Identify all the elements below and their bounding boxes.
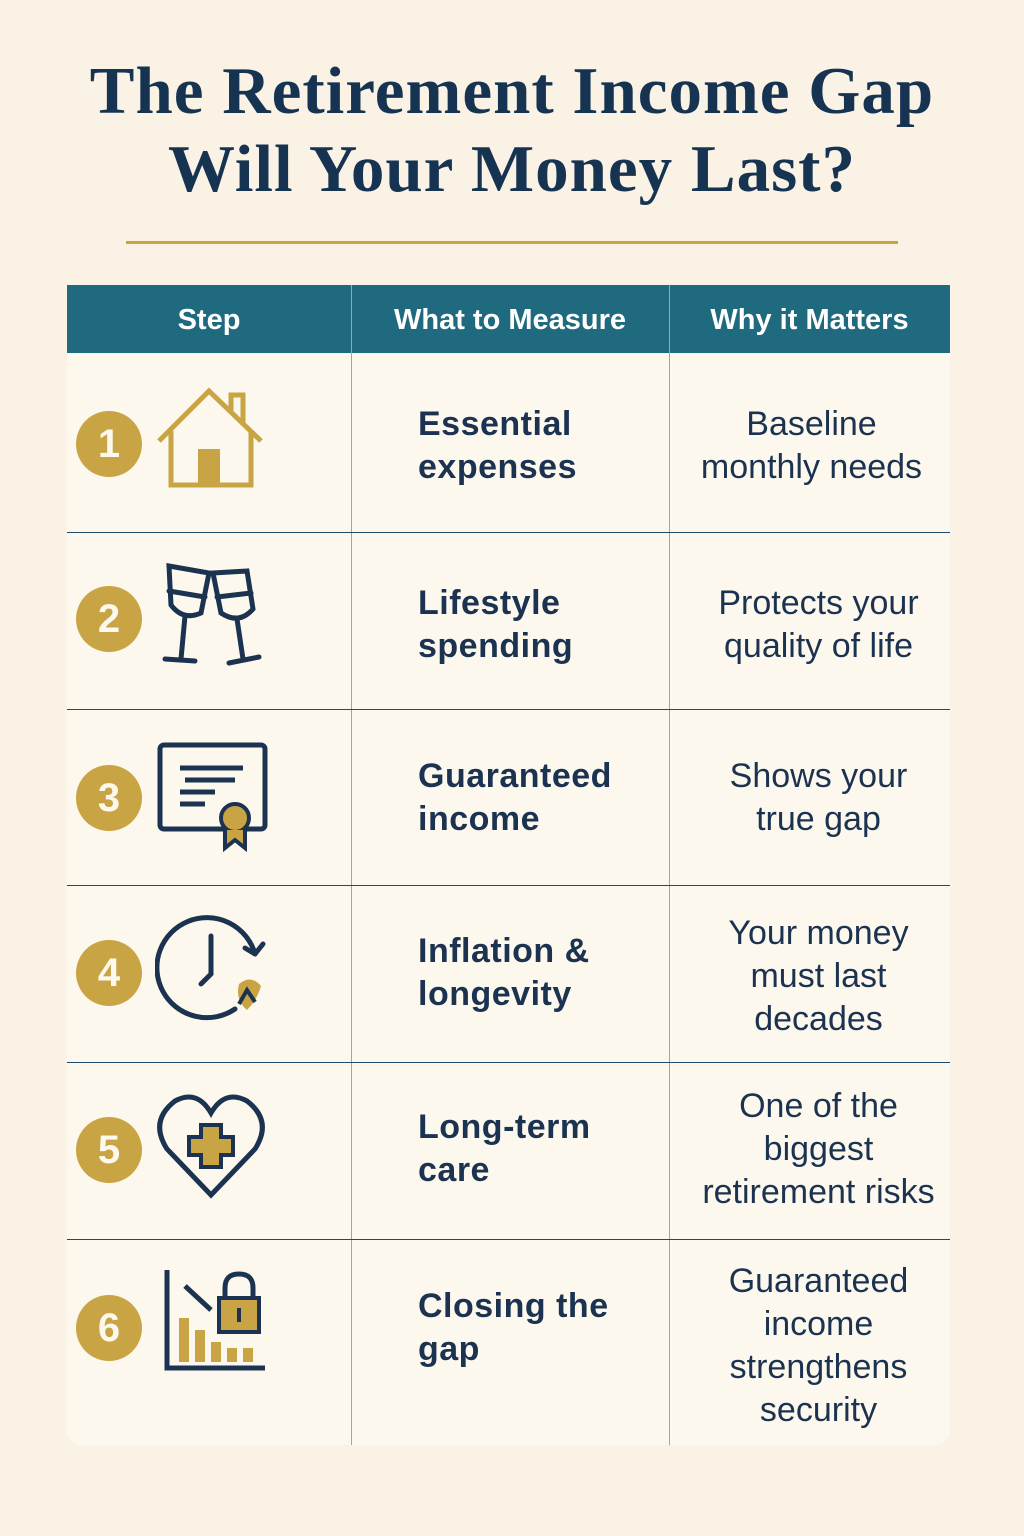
- icon: clock: [155, 915, 266, 1020]
- title: [90, 54, 934, 206]
- why 6: security: [760, 1391, 877, 1429]
- row 4: [67, 885, 950, 1063]
- header row: Step: [178, 304, 240, 336]
- badge 2: 2: [98, 597, 120, 641]
- badge 3: [76, 765, 142, 831]
- measure 6: Closing the: [418, 1287, 609, 1325]
- measure 2: spending: [418, 627, 573, 665]
- why 3: true gap: [756, 800, 881, 838]
- icon: certificate: [158, 742, 268, 852]
- measure 3: Guaranteed: [418, 757, 612, 795]
- why 4: must last: [750, 957, 887, 995]
- header row: Why it Matters: [710, 304, 909, 336]
- header row: What to Measure: [394, 304, 626, 336]
- why 2: Protects your: [718, 584, 919, 622]
- title: The Retirement Income Gap: [90, 54, 934, 128]
- why 4: Your money: [728, 914, 909, 952]
- badge 4: [76, 940, 142, 1006]
- why 3: Shows your: [730, 757, 907, 795]
- why 5: retirement risks: [702, 1173, 935, 1211]
- badge 6: [76, 1295, 142, 1361]
- measure 1: [418, 405, 577, 486]
- why 5: biggest: [764, 1130, 873, 1168]
- badge 2: [76, 586, 142, 652]
- why 1: monthly needs: [701, 448, 922, 486]
- why 6: strengthens: [730, 1348, 907, 1386]
- measure 2: Lifestyle: [418, 584, 560, 622]
- why 4: decades: [754, 1000, 883, 1038]
- why 2: quality of life: [724, 627, 913, 665]
- badge 5: 5: [98, 1128, 120, 1172]
- badge 5: [76, 1117, 142, 1183]
- measure 5: care: [418, 1151, 490, 1189]
- measure 4: longevity: [418, 975, 572, 1013]
- row 5: [67, 1062, 950, 1240]
- measure 5: Long-term: [418, 1108, 591, 1146]
- row 2: [67, 532, 950, 710]
- why 4: [728, 914, 909, 1038]
- badge 1: [76, 411, 142, 477]
- title: Will Your Money Last?: [168, 132, 856, 206]
- why 3: [730, 757, 907, 838]
- measure 5: [418, 1108, 591, 1189]
- row 1: [76, 388, 922, 488]
- header row: [67, 285, 950, 353]
- measure 1: expenses: [418, 448, 577, 486]
- badge 4: 4: [98, 951, 120, 995]
- measure 4: Inflation &: [418, 932, 590, 970]
- row 6: [67, 1239, 950, 1446]
- icon: glasses: [162, 563, 262, 666]
- badge 3: 3: [98, 776, 120, 820]
- why 1: Baseline: [746, 405, 877, 443]
- why 2: [718, 584, 919, 665]
- why 6: Guaranteed: [729, 1262, 908, 1300]
- measure 2: [418, 584, 573, 665]
- measure 3: income: [418, 800, 540, 838]
- why 1: [701, 405, 922, 486]
- measure 4: [418, 932, 590, 1013]
- measure 1: Essential: [418, 405, 572, 443]
- row 3: [67, 709, 950, 886]
- badge 1: 1: [98, 422, 120, 466]
- badge 6: 6: [98, 1306, 120, 1350]
- why 5: [702, 1087, 935, 1211]
- why 6: [729, 1262, 908, 1429]
- icon: chart lock: [164, 1270, 265, 1370]
- measure 6: gap: [418, 1330, 480, 1368]
- measure 6: [418, 1287, 609, 1368]
- icon: heart: [157, 1094, 265, 1198]
- measure 3: [418, 757, 612, 838]
- why 5: One of the: [739, 1087, 898, 1125]
- table: [67, 285, 950, 1445]
- why 6: income: [764, 1305, 873, 1343]
- icon: house: [157, 388, 263, 488]
